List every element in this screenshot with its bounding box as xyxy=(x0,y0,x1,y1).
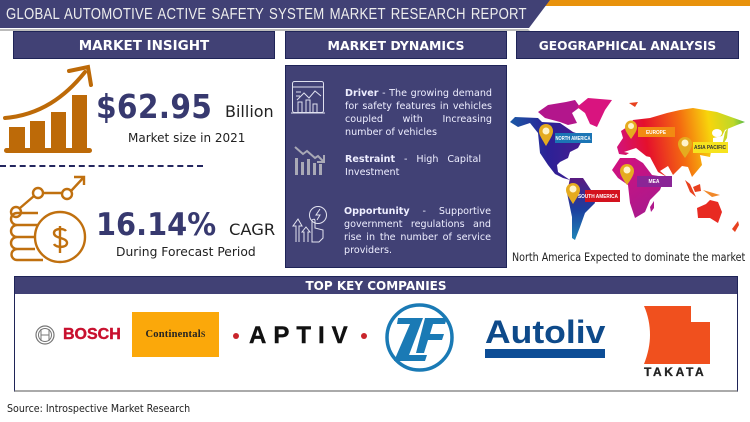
text: opportunity: providers. xyxy=(344,245,392,256)
icon: opportunity hand and arrows xyxy=(292,206,327,242)
text: driver: Driver - The growing demand xyxy=(345,88,492,99)
stat: CAGR value: 16.14% xyxy=(96,207,216,243)
text: driver: for safety features in vehicles xyxy=(345,101,492,112)
region labels xyxy=(555,127,728,202)
South America xyxy=(567,178,595,240)
Mediterranean gap xyxy=(624,148,652,163)
North America xyxy=(510,117,583,180)
heading: top key companies: TOP KEY COMPANIES xyxy=(306,279,446,293)
text: driver: coupled with Increasing xyxy=(345,114,492,125)
title text: GLOBAL AUTOMOTIVE ACTIVE SAFETY SYSTEM MARKET RESEARCH REPORT xyxy=(6,6,527,23)
heading: market dynamics: MARKET DYNAMICS xyxy=(328,38,464,53)
Eurasia xyxy=(617,108,745,177)
stat: market size caption: Market size in 2021 xyxy=(128,131,245,145)
Australia xyxy=(697,200,722,223)
text: restraint: Restraint - High Capital xyxy=(345,154,481,165)
icon: growth bar chart xyxy=(3,64,93,153)
logo: Takata: TAKATA xyxy=(644,365,706,379)
logo: Bosch xyxy=(35,325,121,345)
stat: forecast caption: During Forecast Period xyxy=(116,244,256,259)
icon: coins with trend xyxy=(10,176,86,264)
text: driver: number of vehicles xyxy=(345,127,437,138)
heading: market insight xyxy=(13,31,275,59)
heading: geographical analysis xyxy=(516,31,739,59)
logo: Takata xyxy=(644,306,710,379)
icon: driver analytics xyxy=(291,81,325,114)
region labels: SOUTH AMERICA xyxy=(578,194,618,200)
text: restraint: Investment xyxy=(345,167,399,178)
text: restraint xyxy=(345,154,481,178)
Canadian arctic xyxy=(538,100,580,125)
region labels: EUROPE xyxy=(646,130,667,136)
logo: Continental xyxy=(132,312,219,357)
heading: market dynamics xyxy=(285,31,507,59)
heading: market insight: MARKET INSIGHT xyxy=(79,38,209,54)
stat: CAGR label: CAGR xyxy=(229,220,275,239)
world map xyxy=(510,98,745,240)
panel: market dynamics xyxy=(285,65,507,268)
heading: top key companies xyxy=(15,277,737,294)
logo: Continental: ContinentalS xyxy=(146,329,205,340)
logo: ZF xyxy=(385,303,454,372)
top orange bar xyxy=(540,0,750,6)
text: driver xyxy=(345,88,492,138)
title banner xyxy=(0,0,550,31)
text: opportunity: government regulations and xyxy=(344,219,491,230)
logo: Autoliv: Autoliv xyxy=(485,314,605,350)
Greenland xyxy=(577,98,612,127)
region labels: ASIA PACIFIC xyxy=(694,145,726,151)
dashed divider xyxy=(0,165,203,167)
Africa xyxy=(612,158,665,218)
Okhotsk gap xyxy=(712,129,722,137)
panel: top key companies xyxy=(14,276,738,392)
icon: restraint declining chart xyxy=(294,146,325,175)
map caption: North America Expected to dominate the market xyxy=(512,251,745,264)
region labels: NORTH AMERICA xyxy=(556,136,591,142)
location pins xyxy=(539,120,692,204)
logo: Bosch: BOSCH xyxy=(63,326,121,343)
heading: geographical analysis: GEOGRAPHICAL ANALYSIS xyxy=(539,39,716,53)
text: opportunity: Opportunity - Supportive xyxy=(344,206,491,217)
source note: Source: Introspective Market Research xyxy=(7,403,190,415)
stat: market size value: $62.95 xyxy=(96,87,212,126)
logo: Aptiv: APTIV xyxy=(249,322,355,349)
islands xyxy=(629,102,739,232)
text: opportunity xyxy=(344,206,491,256)
text: opportunity: rise in the number of service xyxy=(344,232,491,243)
stat: billion label: Billion xyxy=(225,102,274,121)
region labels: MEA xyxy=(648,179,660,185)
